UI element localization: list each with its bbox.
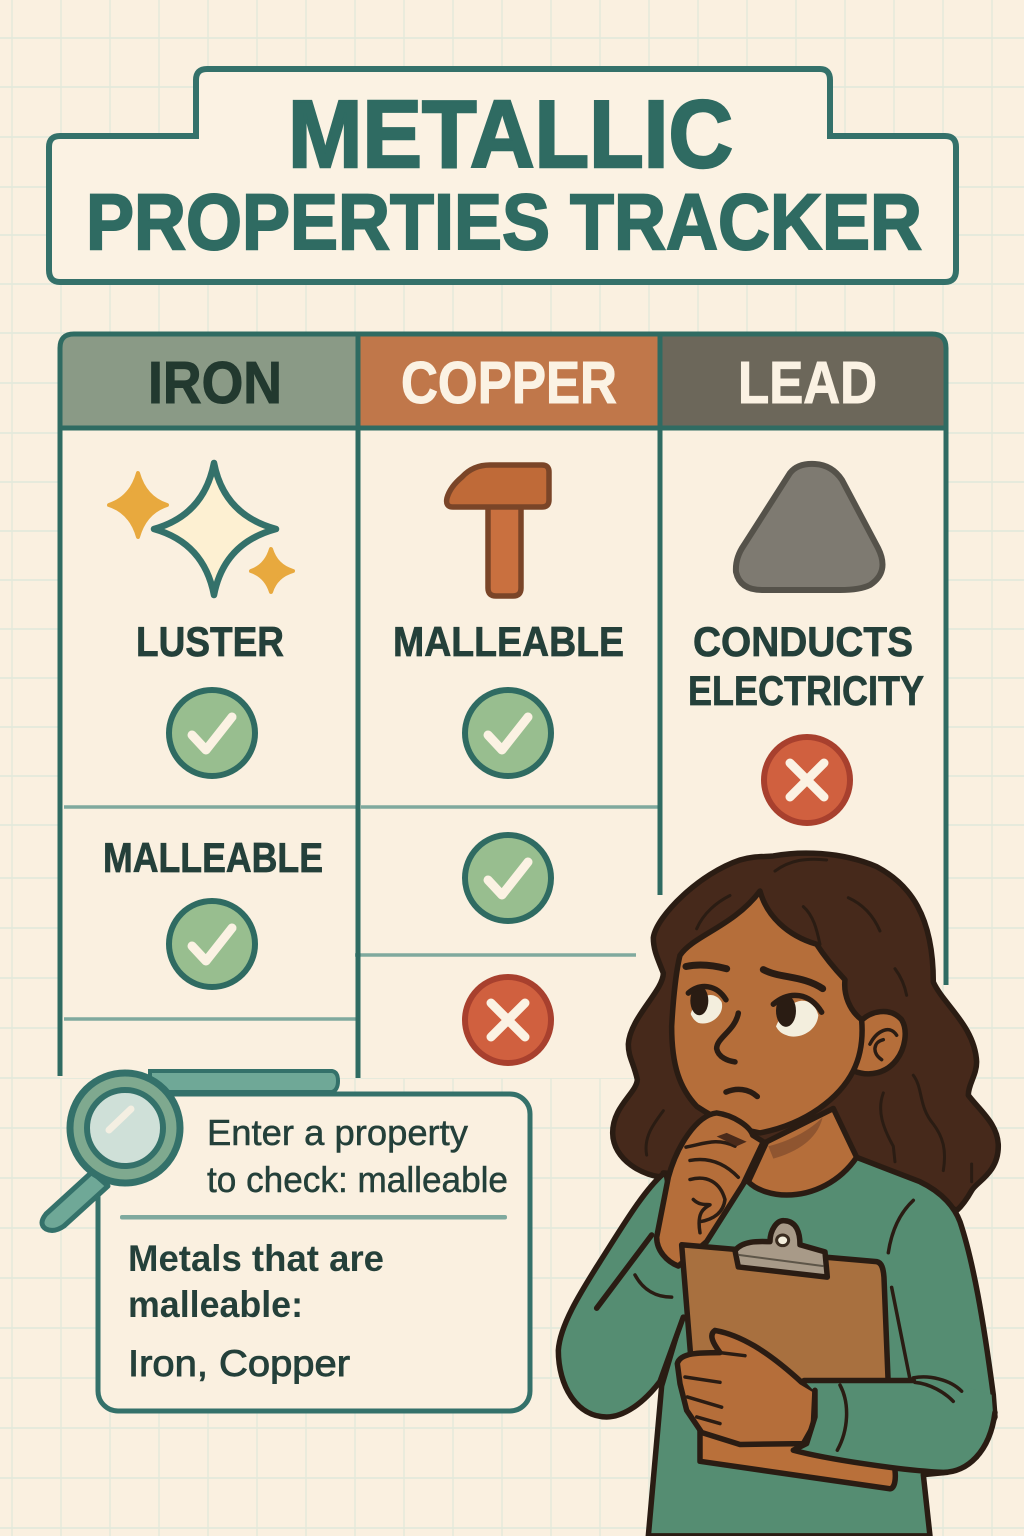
header: copper: COPPER [401, 350, 617, 416]
label: luster: LUSTER [136, 618, 284, 665]
chin hand [657, 1113, 763, 1266]
label: copper malleable: MALLEABLE [393, 618, 624, 665]
icon: lead lump [736, 464, 882, 590]
nose and mouth [717, 1013, 757, 1097]
input prompt text: to check: malleable [207, 1159, 508, 1200]
shirt torso [648, 1157, 995, 1536]
label: conducts electricity: ELECTRICITY [688, 667, 924, 714]
lower hand [677, 1330, 815, 1444]
shirt folds [888, 1200, 913, 1379]
comparison table [60, 333, 946, 1078]
header: iron [60, 334, 358, 428]
icon: magnifying glass [42, 1071, 338, 1230]
title banner [49, 69, 956, 282]
hair [613, 853, 998, 1211]
eyebrows [686, 965, 823, 989]
title line 2: PROPERTIES TRACKER [86, 177, 922, 266]
header: lead: LEAD [738, 350, 877, 416]
result text: Iron, Copper [128, 1343, 350, 1384]
label: conducts electricity [688, 618, 924, 714]
left arm [558, 1174, 687, 1417]
search panel [98, 1094, 530, 1411]
header: copper [358, 333, 660, 428]
hair strands [646, 859, 972, 1182]
input prompt text: Enter a property [207, 1112, 468, 1153]
label: conducts electricity: CONDUCTS [693, 618, 913, 665]
forearm [793, 1377, 995, 1472]
icon: check copper 2 [465, 835, 551, 921]
icon: check copper 1 [465, 690, 551, 776]
girl with clipboard [558, 853, 998, 1536]
input prompt text [207, 1112, 508, 1200]
neck [748, 1108, 857, 1195]
header: iron: IRON [148, 350, 282, 416]
result text [128, 1238, 384, 1384]
icon: cross lead [764, 737, 850, 823]
eyes [688, 986, 822, 1037]
ear [853, 1012, 905, 1074]
icon: check iron malleable [169, 901, 255, 987]
icon: copper hammer [447, 465, 549, 596]
clipboard clip [735, 1221, 827, 1277]
title line 1: METALLIC [288, 81, 733, 188]
label: iron malleable: MALLEABLE [103, 834, 323, 881]
header: lead [660, 334, 946, 428]
icon: luster sparkles [109, 463, 293, 595]
icon: cross copper [465, 977, 551, 1063]
result text: malleable: [128, 1284, 303, 1325]
result text: Metals that are [128, 1238, 384, 1279]
face [672, 891, 862, 1133]
icon: check iron luster [169, 690, 255, 776]
clipboard [682, 1221, 895, 1489]
